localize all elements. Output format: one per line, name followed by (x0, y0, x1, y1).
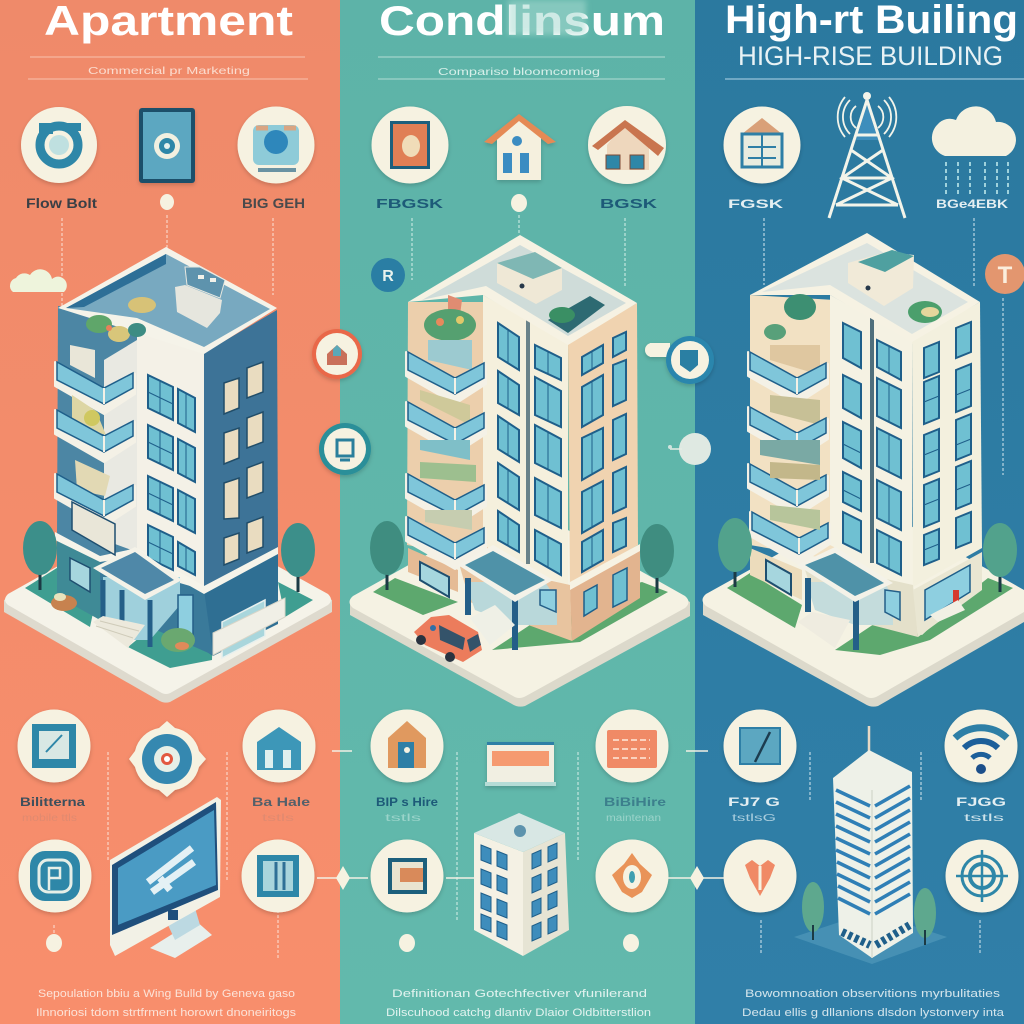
side icon: blue badge (645, 336, 714, 384)
label sub: mobile ttls (22, 813, 77, 824)
dot (46, 934, 62, 952)
front wall (483, 295, 568, 587)
icon: machine (238, 106, 314, 184)
paragraph: Dedau ellis g dllanions dlsdon lystonvery inta (742, 1007, 1005, 1019)
base plate (350, 503, 690, 707)
icon: tablet (139, 108, 195, 183)
plants on roof (86, 315, 146, 342)
icon: flame shield (596, 840, 668, 912)
paragraph: Definitionan Gotechfectiver vfunilerand (392, 988, 647, 1000)
rooftop box (175, 267, 225, 328)
label: BIP s Hire (376, 795, 438, 809)
label: Flow Bolt: Flow Bolt (26, 195, 97, 211)
icon: framed picture (724, 710, 796, 782)
icon: ring (21, 107, 97, 183)
rooftop box (497, 252, 562, 304)
front windows (498, 323, 561, 575)
icon: door house (370, 710, 444, 782)
base plate (4, 505, 332, 703)
icon: frame (18, 710, 90, 782)
trees (370, 521, 674, 593)
right windows (224, 362, 263, 565)
label: FJGG (956, 795, 1006, 809)
front windows (148, 375, 195, 575)
label: BGSK (600, 196, 658, 211)
label sub: tstls (262, 813, 294, 824)
label: Ba Hale (252, 795, 310, 809)
subtitle: HIGH-RISE BUILDING (738, 41, 1003, 71)
garden (51, 593, 195, 652)
icon: house blue (242, 710, 316, 782)
ground floor (802, 560, 918, 637)
label: right: BIG GEH (242, 195, 305, 211)
badge (985, 254, 1024, 294)
rooftop box (848, 250, 914, 306)
right wall (568, 303, 638, 584)
car (414, 615, 482, 662)
connector: bottom links (317, 751, 724, 890)
icon: home circle (588, 106, 666, 184)
roof (750, 233, 980, 342)
panel: high-rise building (695, 0, 1024, 1024)
panel: apartment (0, 0, 340, 1024)
balconies (406, 340, 486, 569)
building: condominium (350, 235, 690, 707)
right wall (912, 302, 982, 587)
bottom row icons: condominium (370, 710, 668, 1019)
icon: target (946, 840, 1018, 912)
left wall (750, 295, 835, 560)
icon: cloud (932, 106, 1016, 195)
rooftop garden (764, 294, 942, 340)
right windows (582, 332, 626, 572)
label: FBGSK (376, 196, 444, 211)
icon: box frame (370, 840, 444, 912)
icon: cloud small (10, 269, 67, 292)
base plate (702, 503, 1024, 707)
ground floor (458, 560, 572, 641)
entrance (458, 545, 557, 650)
bottom row icons: apartment (18, 710, 316, 1019)
entrance (93, 547, 193, 648)
paragraph: Sepoulation bbiu a Wing Bulld by Geneva gaso (38, 988, 295, 1000)
ground floor (204, 550, 278, 656)
right wall (204, 310, 278, 590)
icon: square glyph (242, 840, 314, 912)
icon: rounded square (18, 840, 92, 912)
icon: house (484, 114, 556, 180)
dot (511, 194, 527, 212)
icon: window home (724, 106, 800, 184)
icon: compass (129, 721, 206, 797)
trees (23, 521, 315, 592)
left wall (407, 302, 488, 560)
icon: tower (829, 92, 905, 218)
icon: skyscraper (794, 726, 947, 964)
front wall (137, 318, 204, 590)
label sub: tstls (964, 813, 1004, 824)
label: BiBiHire (604, 795, 666, 809)
icon: card (485, 742, 556, 786)
label sub: tstls (385, 813, 421, 824)
label sub: tstlsG (732, 813, 776, 824)
roof (408, 235, 637, 345)
rooftop garden (424, 295, 605, 341)
icon: small building (474, 813, 569, 956)
badge: R (382, 268, 394, 285)
subtitle: Compariso bloomcomiog (438, 67, 600, 78)
building: high-rise (702, 233, 1024, 707)
badge (371, 258, 405, 292)
icon: orange emblem (724, 840, 796, 912)
paragraph: Ilnnoriosi tdom strtfrment horowrt dnoneiritogs (36, 1007, 297, 1019)
trees (718, 518, 1017, 592)
icon: orange card (596, 710, 668, 782)
side icon: small house badge (312, 329, 362, 379)
roof (58, 247, 277, 354)
paragraph: Dilscuhood catchg dlantiv Dlaior Oldbitterstlion (386, 1007, 651, 1019)
panel: condominium (340, 0, 695, 1024)
icon: art frame (372, 106, 448, 184)
dot (399, 934, 415, 952)
side icon: pale badge (668, 433, 711, 465)
entrance (797, 547, 900, 650)
label sub: maintenan (606, 813, 661, 824)
ground windows (72, 502, 115, 555)
fence (213, 598, 285, 655)
subtitle: Commercial pr Marketing (88, 66, 250, 77)
balconies (55, 345, 135, 526)
dot (160, 194, 174, 210)
side icon: teal badge (319, 423, 371, 475)
label: FJ7 G (728, 795, 780, 809)
front windows (843, 323, 901, 575)
bottom row icons: high-rise (724, 710, 1018, 1019)
icon: wifi (944, 710, 1018, 782)
label: BGe4EBK (936, 197, 1008, 211)
paragraph: Bowomnoation observitions myrbulitaties (745, 988, 1001, 1000)
dot (623, 934, 639, 952)
building: apartment (4, 247, 332, 703)
balconies (748, 345, 830, 564)
label: Bilitterna (20, 795, 85, 809)
badge: T (998, 262, 1013, 289)
icon: monitor (110, 797, 221, 958)
right windows (924, 322, 971, 565)
front wall (830, 295, 912, 587)
left wall (57, 306, 137, 590)
label: FGSK (728, 197, 784, 211)
